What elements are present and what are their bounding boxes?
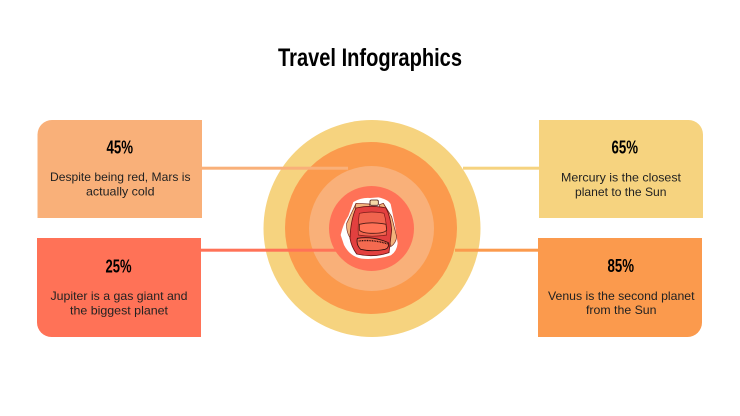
- panel: 45% Mars: [38, 120, 202, 218]
- panel: 65% Mercury: 65%: [612, 138, 638, 158]
- panel: 25% Jupiter: 25%: [106, 256, 132, 276]
- panel: 45% Mars: Despite being red, Mars is: [50, 170, 190, 184]
- panel: 85% Venus: Venus is the second planet: [548, 289, 695, 303]
- connector: 45%: [201, 167, 348, 170]
- panel: 85% Venus: [538, 238, 702, 337]
- panel: 25% Jupiter: [37, 238, 201, 337]
- icon: backpack: [341, 197, 398, 259]
- panel: 25% Jupiter: Jupiter is a gas giant and: [50, 289, 188, 303]
- connector: 25%: [200, 249, 336, 252]
- concentric circles: [264, 120, 480, 337]
- panel: 45% Mars: 45%: [106, 138, 133, 158]
- title: Travel Infographics: [278, 44, 462, 72]
- panel: 85% Venus: 85%: [608, 256, 634, 276]
- panel: 65% Mercury: Mercury is the closest: [561, 170, 682, 184]
- panel: 85% Venus: from the Sun: [586, 303, 656, 317]
- panel: 45% Mars: actually cold: [86, 184, 154, 198]
- panel: 25% Jupiter: the biggest planet: [70, 304, 169, 318]
- panel: 65% Mercury: planet to the Sun: [575, 185, 666, 199]
- connector: 65%: [463, 167, 540, 170]
- panel: 65% Mercury: [539, 120, 703, 218]
- connector: 85%: [455, 249, 539, 252]
